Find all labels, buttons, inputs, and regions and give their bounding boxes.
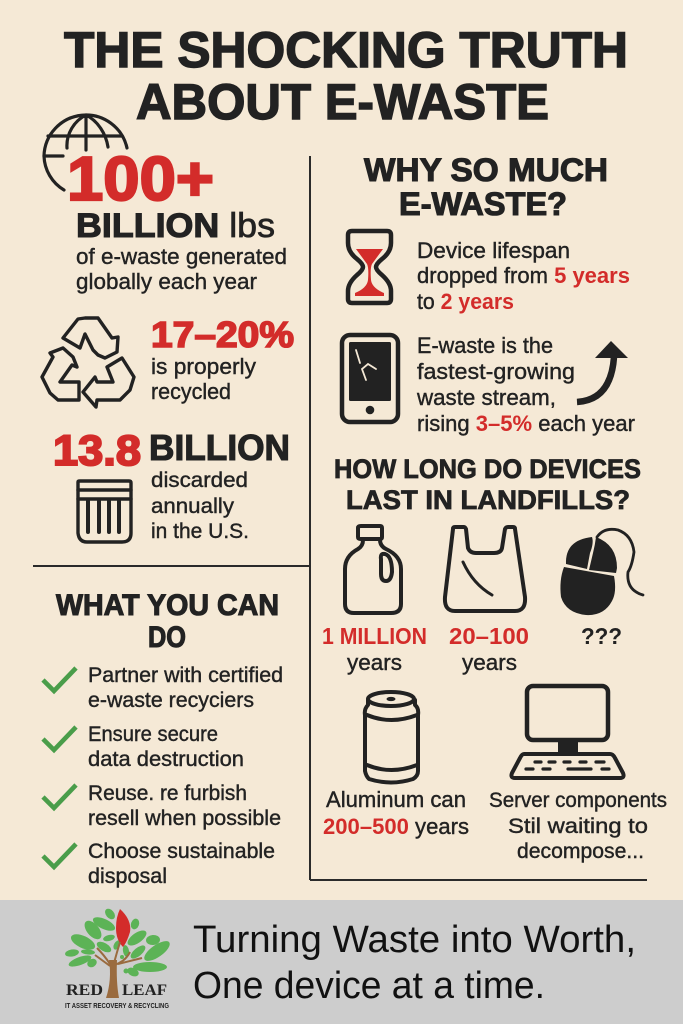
heading: landfills: HOW LONG DO DEVICES	[334, 454, 641, 484]
heading: why so much	[364, 152, 608, 222]
list: actions: Choose sustainable	[88, 840, 275, 863]
panel: how long in landfills	[322, 454, 667, 863]
text: discarded annually: discarded	[151, 469, 248, 492]
panel: footer	[0, 900, 683, 1024]
list: actions: Reuse. re furbish	[88, 782, 247, 805]
text: fastest-growing: E-waste is the	[417, 333, 553, 358]
title: ABOUT E-WASTE	[136, 74, 549, 130]
list: actions: data destruction	[88, 748, 244, 771]
list: actions	[88, 664, 283, 888]
text: device lifespan: Device lifespan	[417, 238, 570, 263]
heading: why so much: E-WASTE?	[399, 186, 567, 222]
text: aluminum can: 200–500 years	[323, 814, 469, 839]
text: 20-100 years: 20–100	[449, 623, 529, 649]
text: 1 million years: years	[347, 650, 402, 675]
text: unknown: ???	[581, 623, 622, 649]
text: discarded annually	[151, 469, 249, 543]
icon: mouse	[560, 529, 643, 615]
logo text: leaf: LEAF	[122, 982, 167, 999]
text: aluminum can: Aluminum can	[326, 787, 466, 812]
text: properly recycled: is properly	[151, 354, 256, 379]
text: to 2 years: to 2 years	[417, 289, 514, 314]
panel: why so much e-waste	[342, 152, 635, 436]
tagline: Turning Waste into Worth,	[193, 919, 636, 961]
text: dropped from 5 years: dropped from 5 years	[417, 263, 630, 288]
text: fastest-growing	[416, 333, 635, 436]
heading: what you can do	[56, 589, 279, 654]
icon: cracked phone	[342, 335, 398, 422]
list: actions: Partner with certified	[88, 664, 283, 687]
text: 20-100 years: years	[462, 650, 517, 675]
stat label: billion: BILLION	[149, 427, 290, 468]
text: discarded annually: annually	[151, 495, 235, 518]
list: actions: resell when possible	[88, 807, 281, 830]
text: aluminum can	[323, 787, 469, 839]
text: discarded annually: in the U.S.	[151, 520, 249, 543]
panel: what you can do	[43, 589, 283, 888]
text: server components: decompose...	[517, 840, 644, 863]
text: fastest-growing: rising 3–5% each year	[417, 411, 635, 436]
list: actions: Ensure secure	[88, 723, 218, 746]
text: properly recycled: recycled	[151, 379, 231, 404]
text: 1 million years: 1 MILLION	[322, 623, 427, 649]
stat: 13.8: 13.8	[53, 427, 141, 475]
text: server components: Server components	[489, 789, 667, 812]
tagline: One device at a time.	[193, 965, 545, 1007]
icon: checks	[43, 668, 76, 867]
title	[64, 22, 628, 130]
list: actions: e-waste recyciers	[88, 689, 254, 712]
panel: global stats	[44, 115, 287, 294]
logo text: red: RED	[66, 982, 103, 999]
heading: landfills	[334, 454, 641, 515]
logo tagline: IT ASSET RECOVERY & RECYCLING	[65, 1003, 169, 1010]
text: server components	[489, 789, 667, 863]
tagline	[193, 919, 636, 1007]
text: generated globally: globally each year	[76, 269, 257, 294]
text: properly recycled	[151, 354, 256, 404]
icon: trash bin	[78, 481, 131, 542]
heading: what you can do: DO	[148, 621, 186, 654]
stat: 100+: 100+	[67, 145, 214, 214]
icon: computer	[511, 686, 624, 778]
icon: hourglass	[348, 231, 391, 303]
text: generated globally: of e-waste generated	[76, 244, 287, 269]
heading: landfills: LAST IN LANDFILLS?	[346, 485, 630, 515]
stat label: billion lbs: BILLION lbs	[76, 207, 275, 245]
text: 1 million years	[322, 623, 427, 675]
stat: 17-20%: 17–20%	[151, 314, 294, 355]
icon: globe	[44, 115, 127, 190]
icon: bottle	[345, 526, 401, 613]
heading: what you can do: WHAT YOU CAN	[56, 589, 279, 622]
list: actions: disposal	[88, 865, 167, 888]
text: 20-100 years	[449, 623, 529, 675]
icon: aluminum can	[365, 692, 418, 782]
icon: recycle	[42, 318, 134, 407]
icon: plastic bag	[445, 527, 525, 611]
panel: discarded stat	[53, 427, 290, 543]
text: server components: Stil waiting to	[508, 815, 648, 838]
logo: red leaf	[64, 907, 173, 1010]
text: fastest-growing: waste stream,	[416, 385, 556, 410]
text: generated globally	[76, 244, 287, 294]
panel: recycled stat	[42, 314, 294, 407]
text: fastest-growing: fastest-growing	[417, 359, 575, 384]
icon: up arrow	[577, 341, 628, 402]
heading: why so much: WHY SO MUCH	[364, 152, 608, 188]
title: THE SHOCKING TRUTH	[64, 22, 628, 78]
